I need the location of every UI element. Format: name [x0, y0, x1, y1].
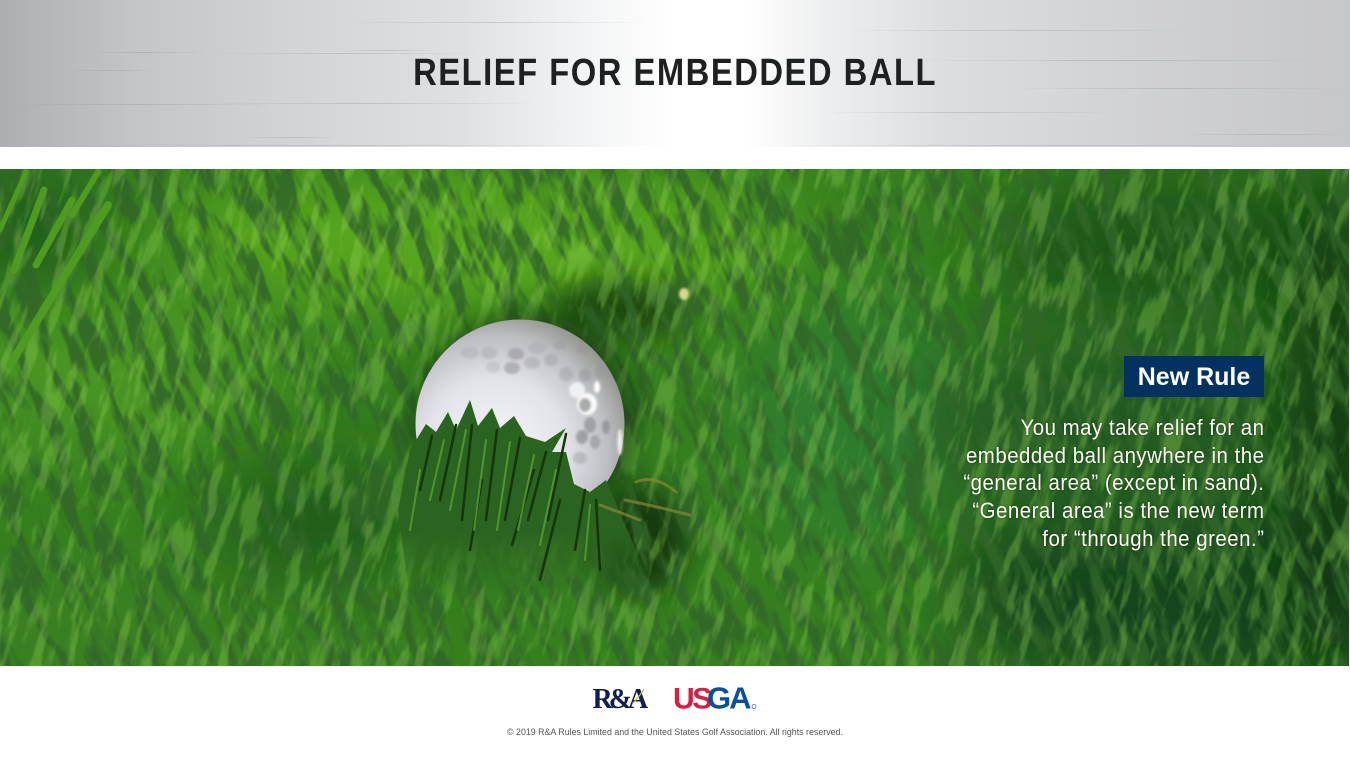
panel: grass photo with golf ball [0, 169, 1349, 666]
golden debris beside ball [600, 480, 690, 520]
golf ball [416, 320, 624, 492]
pale flower speck [679, 288, 689, 300]
header band: brushed metal with title [0, 0, 1350, 147]
rule text block: “general area” (except in sand). [963, 470, 1264, 495]
logos: R&A and USGA [592, 682, 756, 714]
rule text block: embedded ball anywhere in the [966, 443, 1264, 468]
rule text block [963, 415, 1264, 552]
title: RELIEF FOR EMBEDDED BALL [413, 52, 937, 94]
grass base colour [0, 169, 1349, 666]
bright dimple highlight [569, 381, 622, 455]
rule text block: for “through the green.” [1042, 526, 1264, 551]
ball dimples [461, 340, 610, 464]
copyright line: © 2019 R&A Rules Limited and the United States Golf Association. All rights reserved. [507, 726, 843, 736]
grass light and shadow regions [0, 160, 1350, 700]
shadow hollow around ball [415, 314, 635, 526]
grass tuft covering lower ball [398, 400, 640, 600]
long blades at upper left [0, 172, 108, 365]
rule text block: “General area” is the new term [972, 498, 1264, 523]
grass blade texture [0, 169, 1349, 666]
rule text block: You may take relief for an [1020, 415, 1264, 440]
badge: New Rule: New Rule [1138, 363, 1250, 391]
logo: USGA [673, 680, 756, 716]
badge: New Rule [1124, 356, 1264, 397]
